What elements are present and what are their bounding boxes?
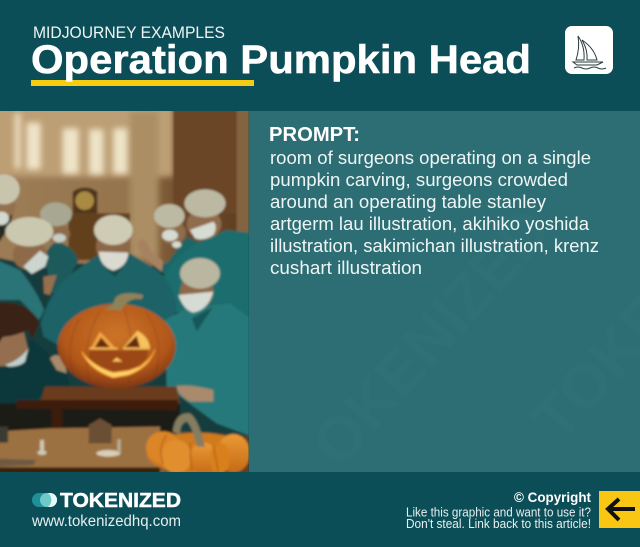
small pumpkin [146,413,250,474]
icon: midjourney boat logo [565,26,613,74]
eyebrow: MIDJOURNEY EXAMPLES [33,24,225,42]
surgeon: right back [160,236,198,274]
windows [15,113,127,174]
logo: tokenized [31,490,181,530]
copyright notice: Like this graphic and want to use it? [406,506,591,520]
prompt text: room of surgeons operating on a single [270,148,591,168]
surgeon: top left [0,214,14,242]
copyright notice [406,489,591,531]
panel: prompt [249,111,640,479]
large carved pumpkin [58,304,176,388]
title: Operation Pumpkin Head [31,38,531,82]
carved face [82,331,155,378]
heading group [31,24,531,86]
prompt text: cushart illustration [270,258,422,278]
prompt text [270,148,599,278]
icon: yellow arrow box [599,491,640,528]
prompt text: artgerm lau illustration, akihiko yoshida [270,214,590,234]
prompt text: pumpkin carving, surgeons crowded [270,170,568,190]
copyright notice: © Copyright [514,489,591,505]
panel: prompt: OKENIZED [299,195,565,479]
prompt text: around an operating table stanley [270,192,546,212]
heading: prompt: PROMPT: [269,124,360,146]
website: www.tokenizedhq.com [31,513,181,530]
wordmark: TOKENIZED [60,490,181,512]
dark base behind figures [0,257,248,437]
wall clock [73,187,97,213]
logo mark [32,493,57,507]
surgeon: bottom left [0,340,70,404]
surgeon: left [0,258,44,320]
title underline [31,80,254,86]
surgeon: top right [163,228,249,318]
illustration: surgeons operating on a pumpkin [0,103,260,480]
surgeon: front right [165,303,257,438]
surgeon: back left [43,242,78,297]
surgeon: centre [41,253,177,350]
tabletop and instruments [0,427,160,477]
table [0,403,180,433]
prompt text: illustration, sakimichan illustration, krenz [270,236,599,256]
copyright notice: Don't steal. Link back to this article! [406,517,591,531]
